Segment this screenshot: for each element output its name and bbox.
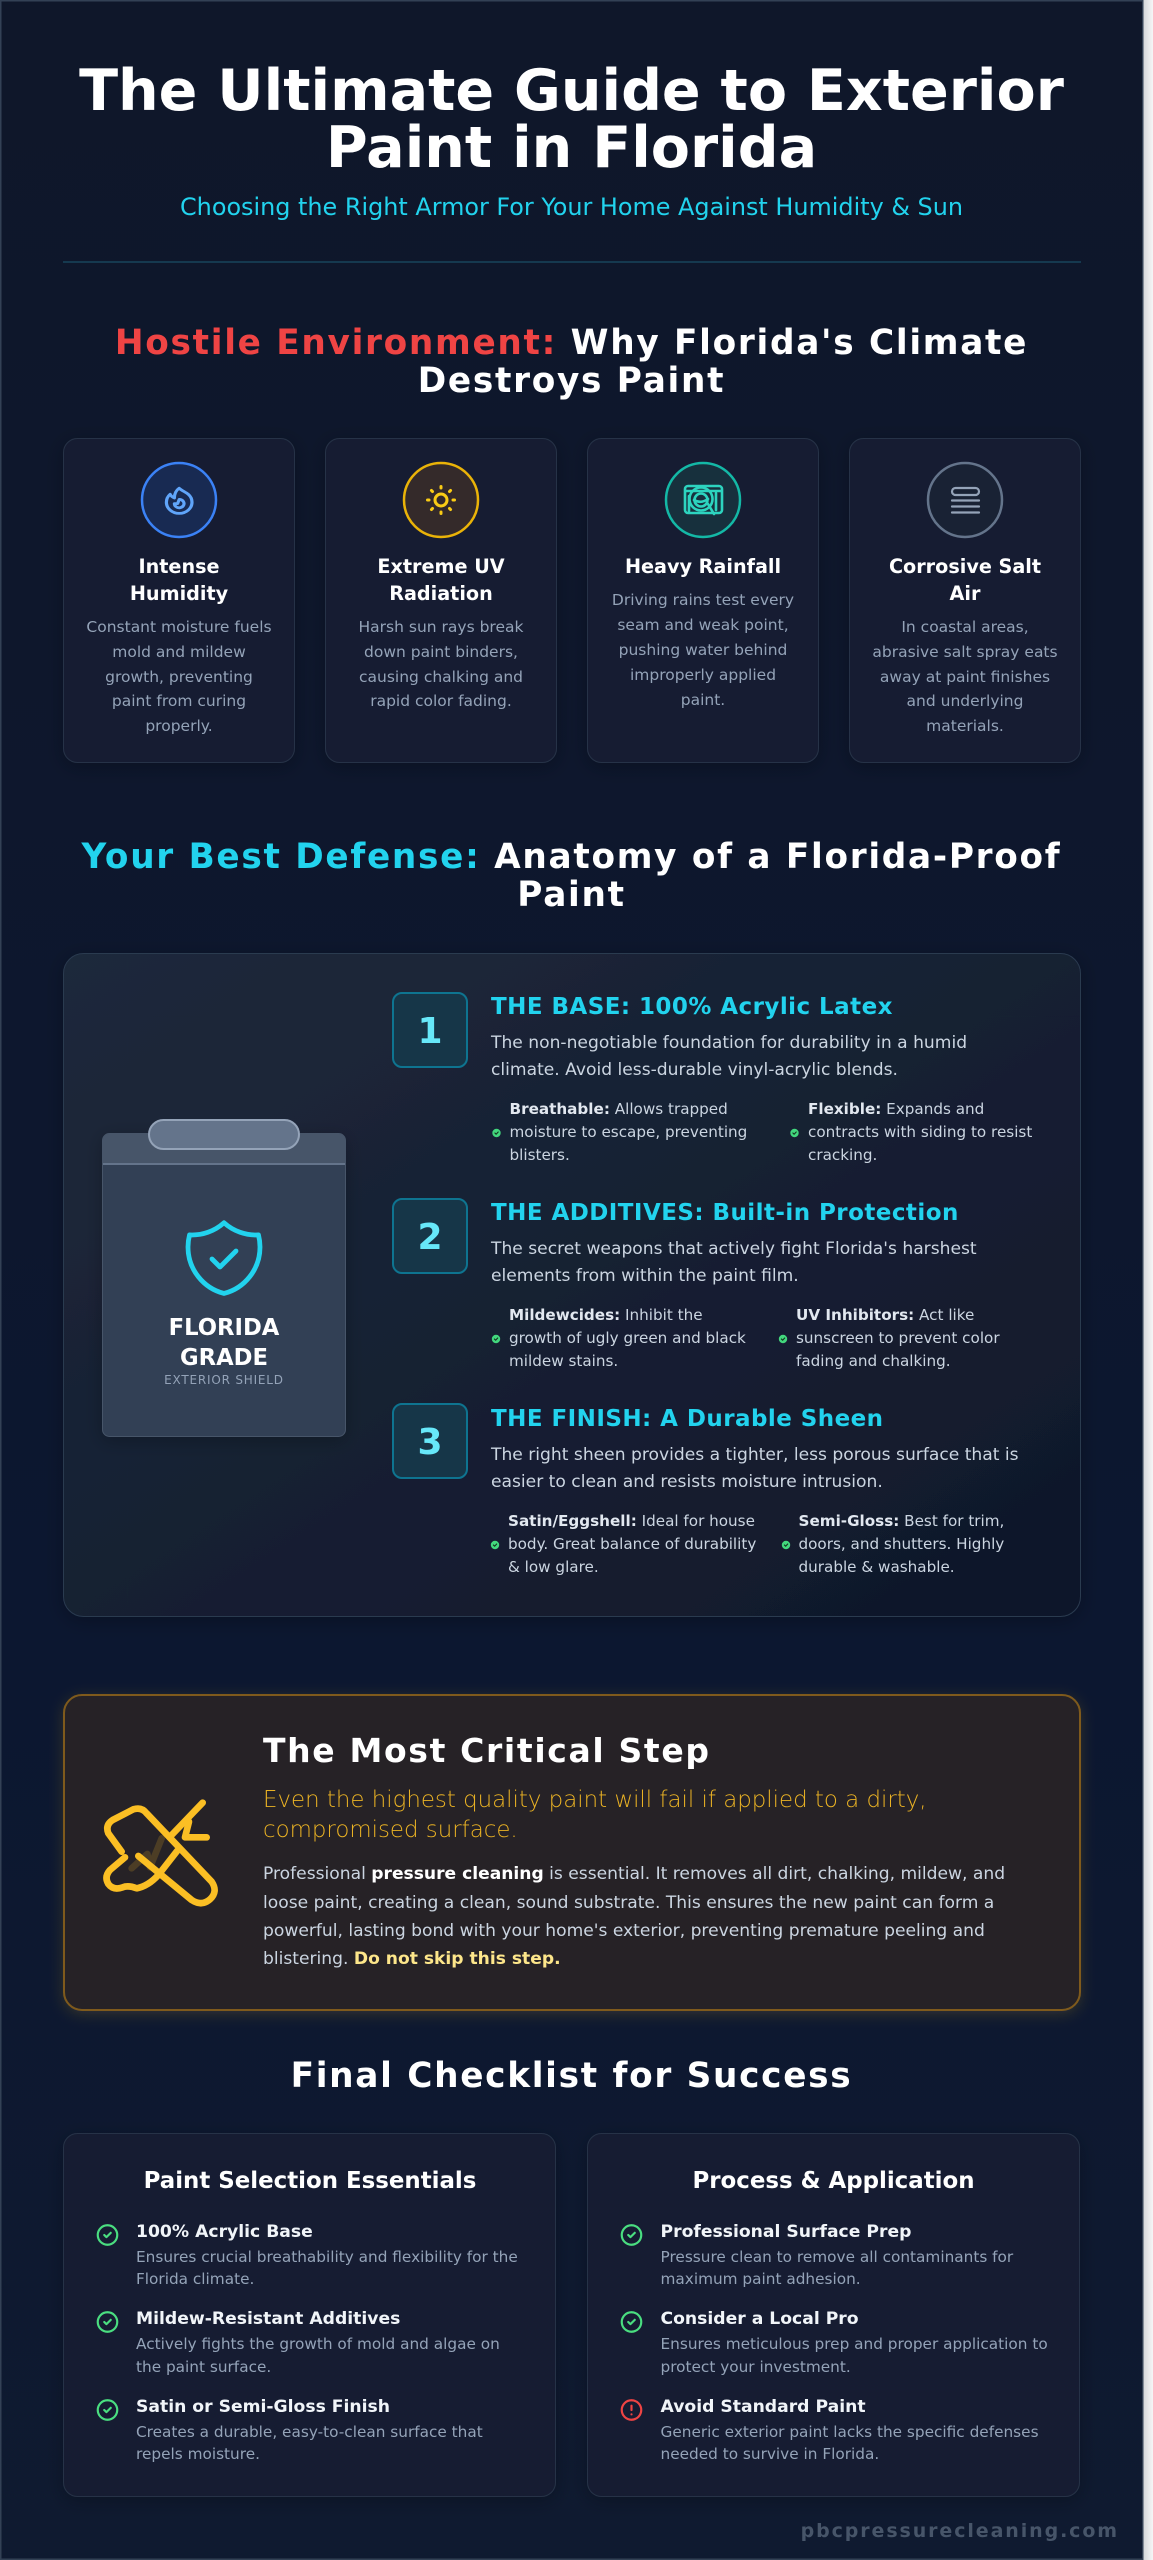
- heading: your best defense: Paint: [517, 875, 626, 915]
- panel: intense humidity: Humidity: [130, 582, 229, 605]
- check item: satin finish: Satin or Semi-Gloss Finish: [136, 2397, 390, 2417]
- panel: extreme uv radiation: down paint binders,: [364, 643, 518, 661]
- check item: acrylic base: Florida climate.: [136, 2270, 254, 2288]
- panel: heavy rainfall: pushing water behind: [619, 641, 787, 659]
- heading: your best defense: [81, 837, 1061, 915]
- check item: surface prep: [622, 2222, 1014, 2288]
- panel: most critical step: blistering. Do not skip this step.: [263, 1949, 561, 1969]
- panel: corrosive salt air: Corrosive Salt: [889, 555, 1041, 578]
- bullet: uv inhibitors: UV Inhibitors: Act like: [796, 1306, 974, 1324]
- check item: local pro: [622, 2309, 1048, 2376]
- number badge 1: 1: [417, 1011, 443, 1052]
- panel: anatomy of paint: [64, 954, 1080, 1616]
- panel: most critical step: Even the highest quality paint will fail if applied to a dirty,: [263, 1787, 927, 1813]
- icon: shield check: [188, 1223, 260, 1293]
- panel: extreme uv radiation: rapid color fading.: [370, 692, 512, 710]
- step 1: the base: [393, 993, 1032, 1164]
- title: [79, 58, 1064, 181]
- panel: corrosive salt air: materials.: [926, 717, 1004, 735]
- panel: intense humidity: [64, 438, 294, 762]
- heading: hostile environment: Hostile Environment: Why Florida's Climate: [115, 323, 1028, 363]
- number badge 3: 3: [417, 1422, 443, 1463]
- clipboard illustration: EXTERIOR SHIELD: [164, 1373, 284, 1387]
- panel: extreme uv radiation: Harsh sun rays break: [359, 618, 523, 636]
- title: Paint in Florida: [326, 115, 817, 181]
- panel: intense humidity: growth, preventing: [105, 668, 253, 686]
- check item: satin finish: [98, 2397, 483, 2463]
- number badge 2: 2: [417, 1217, 443, 1258]
- panel: heavy rainfall: Heavy Rainfall: [625, 555, 781, 578]
- heading: your best defense: Your Best Defense: Anatomy of a Florida-Proof: [81, 837, 1061, 877]
- step 3: the finish: The right sheen provides a tighter, less porous surface that is: [490, 1445, 1019, 1465]
- bullet: breathable: Breathable: Allows trapped: [510, 1100, 728, 1118]
- panel: most critical step: Professional pressure cleaning is essential. It removes all dirt, chalking, mildew, and: [263, 1864, 1005, 1884]
- panel: intense humidity: Intense: [138, 555, 220, 578]
- panel: intense humidity: mold and mildew: [112, 643, 246, 661]
- heading: final checklist: Final Checklist for Success: [291, 2056, 852, 2096]
- panel: corrosive salt air: [850, 438, 1080, 762]
- bullet: satin eggshell: Satin/Eggshell: Ideal for house: [508, 1512, 755, 1530]
- number badge 1: [393, 993, 467, 1067]
- warning item: avoid standard paint: needed to survive in Florida.: [660, 2445, 879, 2463]
- icon: humidity flame: [142, 463, 216, 537]
- bullet: satin eggshell: [491, 1512, 756, 1576]
- warning item: avoid standard paint: [622, 2397, 1039, 2463]
- bullet: flexible: Flexible: Expands and: [808, 1100, 984, 1118]
- panel: intense humidity: paint from curing: [112, 692, 246, 710]
- bullet: uv inhibitors: [779, 1306, 1000, 1370]
- bullet: flexible: [790, 1100, 1032, 1164]
- panel: heavy rainfall: paint.: [681, 691, 725, 709]
- clipboard illustration: FLORIDA: [169, 1315, 280, 1341]
- check item: surface prep: Pressure clean to remove all contaminants for: [660, 2248, 1014, 2266]
- icon: sun: [404, 463, 478, 537]
- footer brand: pbcpressurecleaning.com: [801, 2520, 1119, 2542]
- panel: intense humidity: Constant moisture fuels: [86, 618, 272, 636]
- subtitle: Choosing the Right Armor For Your Home Against Humidity & Sun: [180, 193, 963, 221]
- panel: corrosive salt air: and underlying: [907, 692, 1023, 710]
- panel: process and application: Process & Application: [692, 2168, 975, 2194]
- panel: heavy rainfall: seam and weak point,: [617, 616, 789, 634]
- step 1: the base: The non-negotiable foundation for durability in a humid: [490, 1033, 967, 1053]
- clipboard illustration: GRADE: [180, 1345, 268, 1371]
- step 3: the finish: [393, 1404, 1019, 1576]
- check item: mildew additives: Mildew-Resistant Additives: [136, 2309, 400, 2329]
- panel: extreme uv radiation: Extreme UV: [377, 555, 505, 578]
- panel: intense humidity: properly.: [145, 717, 213, 735]
- bullet: breathable: moisture to escape, preventing: [510, 1123, 747, 1141]
- bullet: mildewcides: mildew stains.: [509, 1352, 618, 1370]
- warning item: avoid standard paint: Avoid Standard Paint: [660, 2397, 866, 2417]
- step 2: the additives: elements from within the paint film.: [491, 1266, 799, 1286]
- check item: local pro: protect your investment.: [660, 2358, 851, 2376]
- panel: extreme uv radiation: [326, 438, 556, 762]
- warning item: avoid standard paint: Generic exterior paint lacks the specific defenses: [660, 2423, 1039, 2441]
- bullet: flexible: contracts with siding to resist: [808, 1123, 1032, 1141]
- step 2: the additives: The secret weapons that actively fight Florida's harshest: [490, 1239, 977, 1259]
- bullet: uv inhibitors: fading and chalking.: [796, 1352, 951, 1370]
- panel: corrosive salt air: away at paint finishes: [880, 668, 1050, 686]
- panel: paint selection essentials: [64, 2134, 556, 2496]
- panel: heavy rainfall: Driving rains test every: [612, 591, 794, 609]
- step 1: the base: THE BASE: 100% Acrylic Latex: [491, 994, 893, 1020]
- step 3: the finish: easier to clean and resists moisture intrusion.: [491, 1472, 883, 1492]
- bullet: semi-gloss: [782, 1512, 1004, 1576]
- check item: mildew additives: Actively fights the growth of mold and algae on: [136, 2335, 500, 2353]
- check item: satin finish: repels moisture.: [136, 2445, 260, 2463]
- step 3: the finish: THE FINISH: A Durable Sheen: [491, 1406, 884, 1432]
- panel: process and application: [588, 2134, 1080, 2496]
- check item: acrylic base: [98, 2222, 518, 2288]
- bullet: mildewcides: growth of ugly green and black: [509, 1329, 746, 1347]
- panel: heavy rainfall: [588, 438, 818, 762]
- panel: extreme uv radiation: Radiation: [389, 582, 493, 605]
- bullet: satin eggshell: body. Great balance of durability: [508, 1535, 756, 1553]
- check item: acrylic base: Ensures crucial breathability and flexibility for the: [136, 2248, 518, 2266]
- check item: local pro: Ensures meticulous prep and proper application to: [660, 2335, 1048, 2353]
- panel: most critical step: compromised surface.: [263, 1817, 518, 1843]
- bullet: mildewcides: [492, 1306, 746, 1370]
- check item: mildew additives: [98, 2309, 500, 2376]
- panel: heavy rainfall: improperly applied: [630, 666, 776, 684]
- step 1: the base: climate. Avoid less-durable vinyl-acrylic blends.: [491, 1060, 898, 1080]
- panel: most critical step: [64, 1695, 1080, 2010]
- icon: tools: [107, 1803, 215, 1903]
- number badge 2: [393, 1199, 467, 1273]
- bullet: satin eggshell: & low glare.: [508, 1558, 599, 1576]
- step 2: the additives: [393, 1199, 1000, 1370]
- panel: most critical step: powerful, lasting bond with your home's exterior, preventing premature peeling and: [263, 1921, 985, 1941]
- panel: corrosive salt air: abrasive salt spray eats: [872, 643, 1058, 661]
- check item: mildew additives: the paint surface.: [136, 2358, 271, 2376]
- check item: local pro: Consider a Local Pro: [660, 2309, 859, 2329]
- bullet: breathable: blisters.: [510, 1146, 570, 1164]
- bullet: semi-gloss: Semi-Gloss: Best for trim,: [798, 1512, 1004, 1530]
- panel: corrosive salt air: In coastal areas,: [901, 618, 1029, 636]
- clipboard illustration: [102, 1120, 346, 1436]
- bullet: flexible: cracking.: [808, 1146, 877, 1164]
- step 2: the additives: THE ADDITIVES: Built-in Protection: [491, 1200, 959, 1226]
- heading: hostile environment: [115, 323, 1028, 401]
- panel: paint selection essentials: Paint Selection Essentials: [144, 2168, 476, 2194]
- check item: surface prep: maximum paint adhesion.: [660, 2270, 861, 2288]
- check item: satin finish: Creates a durable, easy-to-clean surface that: [136, 2423, 483, 2441]
- panel: corrosive salt air: Air: [950, 582, 981, 605]
- panel: most critical step: loose paint, creating a clean, sound substrate. This ensures the new paint can form a: [263, 1893, 994, 1913]
- panel: most critical step: The Most Critical Step: [263, 1731, 711, 1770]
- icon: salt: [928, 463, 1002, 537]
- check item: surface prep: Professional Surface Prep: [660, 2222, 911, 2242]
- bullet: semi-gloss: durable & washable.: [798, 1558, 955, 1576]
- number badge 3: [393, 1404, 467, 1478]
- bullet: breathable: [492, 1100, 747, 1164]
- panel: extreme uv radiation: causing chalking and: [359, 668, 523, 686]
- bullet: semi-gloss: doors, and shutters. Highly: [798, 1535, 1004, 1553]
- icon: rainfall: [666, 463, 740, 537]
- bullet: uv inhibitors: sunscreen to prevent color: [796, 1329, 1000, 1347]
- title: The Ultimate Guide to Exterior: [79, 58, 1064, 124]
- bullet: mildewcides: Mildewcides: Inhibit the: [509, 1306, 703, 1324]
- check item: acrylic base: 100% Acrylic Base: [136, 2222, 313, 2242]
- heading: hostile environment: Destroys Paint: [418, 361, 725, 401]
